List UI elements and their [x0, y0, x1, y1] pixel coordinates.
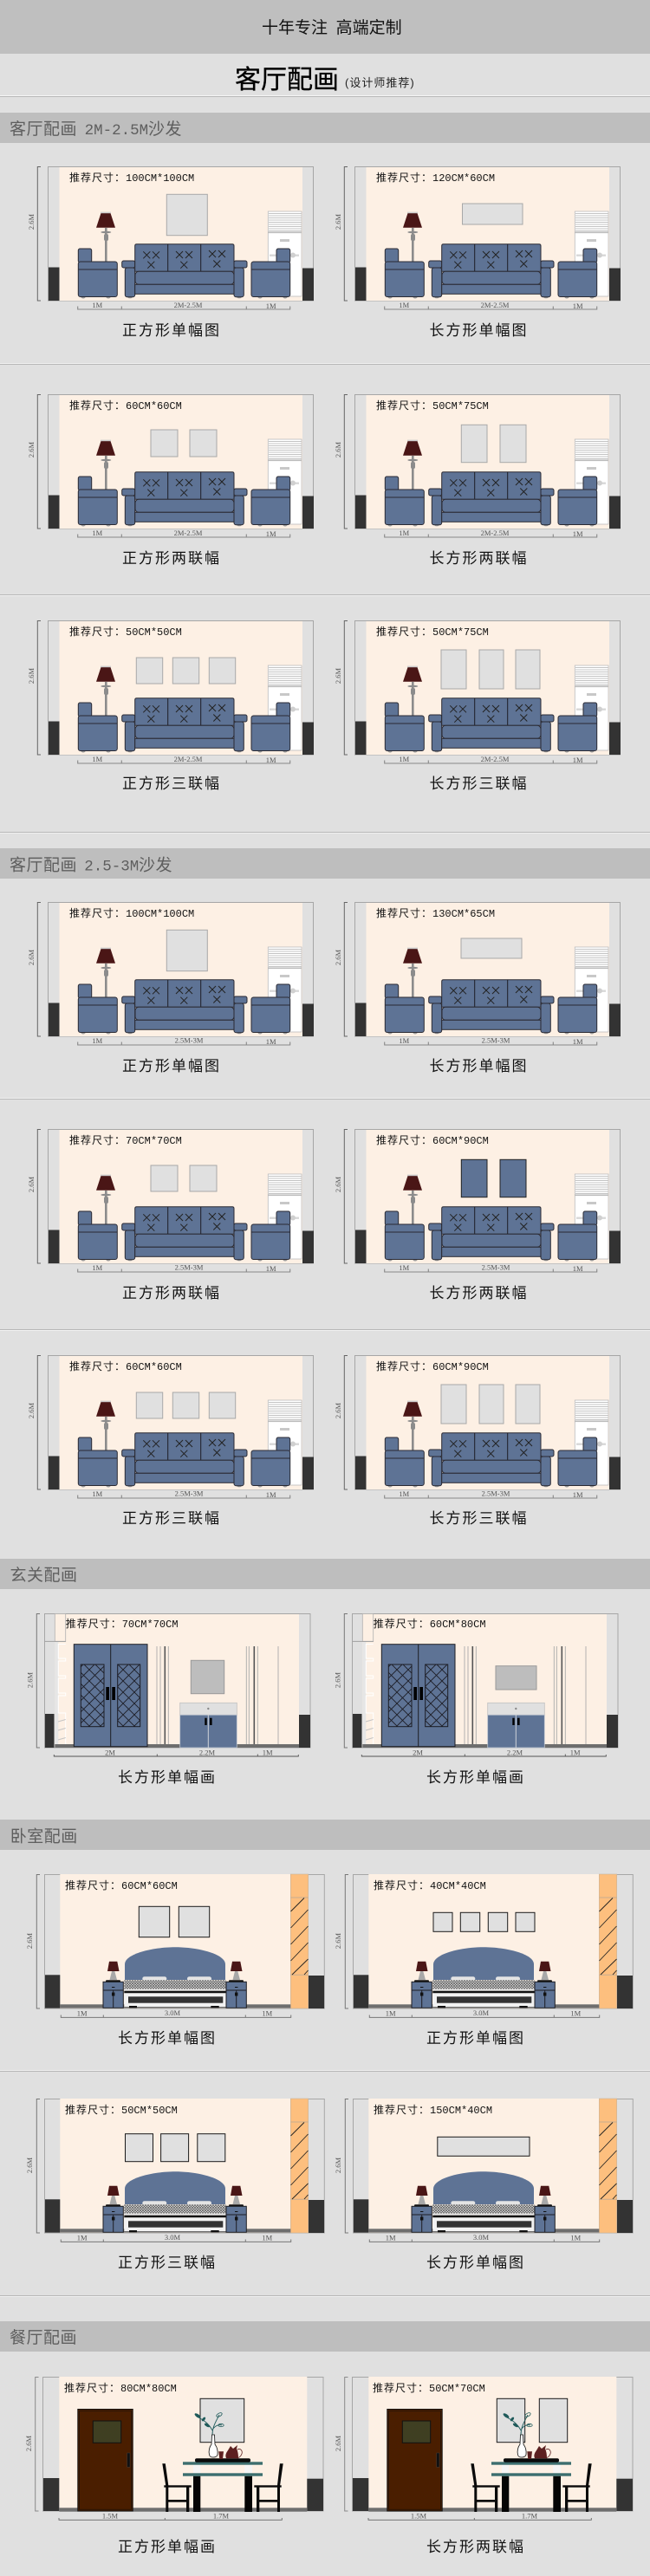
dimensions: 1M — [266, 1037, 276, 1046]
dimensions — [27, 949, 276, 1046]
dimensions: 1M — [570, 2009, 582, 2018]
size label: 推荐尺寸：120CM*60CM — [376, 170, 495, 185]
artwork — [139, 1906, 210, 1937]
dimensions: 2.6M — [26, 1671, 35, 1688]
section heading: living room 2M-2.5M: 沙发 — [148, 120, 182, 139]
size label: 推荐尺寸：50CM*75CM — [376, 624, 489, 639]
panel: living 2 rectangle single — [334, 903, 621, 1074]
dimensions: 1M — [266, 302, 276, 310]
size label: 推荐尺寸：50CM*50CM — [65, 2102, 178, 2117]
dimensions: 1M — [92, 1263, 103, 1272]
dimensions: 2.6M — [27, 213, 36, 230]
dimensions — [25, 2157, 273, 2242]
panel: living 1 rectangle single — [334, 166, 621, 339]
dimensions: 1M — [266, 1490, 276, 1499]
artwork — [463, 204, 523, 224]
caption: 长方形单幅图 — [430, 322, 529, 339]
caption: 正方形两联幅 — [122, 1285, 221, 1301]
caption: 长方形三联幅 — [430, 1510, 529, 1527]
panel: dining right — [334, 2377, 633, 2555]
caption: 正方形两联幅 — [122, 550, 221, 567]
section heading: living room 2M-2.5M — [0, 113, 650, 143]
panel: living 1 square triptych — [27, 620, 314, 792]
dimensions: 1M — [399, 529, 410, 537]
dimensions: 1M — [266, 529, 276, 538]
dimensions: 2M-2.5M — [174, 529, 203, 537]
size label: 推荐尺寸：70CM*70CM — [69, 1132, 182, 1147]
dimensions: 1M — [399, 1489, 410, 1498]
panel: living 1 square single — [27, 166, 314, 339]
dimensions: 2.6M — [334, 667, 342, 684]
dimensions: 2.6M — [27, 1176, 36, 1192]
dimensions: 2.6M — [334, 949, 342, 965]
dimensions: 2.6M — [334, 1176, 342, 1192]
dimensions — [334, 949, 583, 1046]
panel: living 2 rectangle triptych — [334, 1355, 621, 1527]
section heading: living room 2.5-3M — [0, 848, 650, 879]
dimensions — [27, 1176, 276, 1273]
dimensions — [27, 667, 276, 764]
artwork — [136, 658, 236, 684]
dimensions: 1M — [92, 1489, 103, 1498]
dimensions: 1M — [92, 1036, 103, 1045]
dimensions: 2.5M-3M — [482, 1263, 510, 1272]
dimensions: 2M-2.5M — [174, 301, 203, 309]
size label: 推荐尺寸：100CM*100CM — [69, 170, 194, 185]
dimensions: 1M — [573, 756, 583, 764]
section heading: living room 2.5-3M: 2.5-3M — [84, 858, 139, 875]
dimensions: 3.0M — [165, 2233, 181, 2242]
panel: living 1 square diptych — [27, 395, 314, 567]
dimensions: 2.6M — [334, 441, 342, 457]
dimensions — [27, 1402, 276, 1499]
size label: 推荐尺寸：150CM*40CM — [374, 2102, 492, 2117]
panel: bedroom 2 left — [25, 2099, 324, 2271]
dimensions: 1M — [573, 302, 583, 310]
dimensions: 2.6M — [27, 667, 36, 684]
dimensions — [334, 2157, 582, 2242]
dimensions: 1M — [263, 1749, 273, 1757]
dimensions: 1M — [92, 301, 103, 309]
caption: 正方形单幅图 — [426, 2030, 525, 2047]
section heading: living room 2.5-3M: 客厅配画 — [10, 856, 77, 875]
section heading: dining room — [0, 2321, 650, 2352]
artwork — [496, 1666, 536, 1690]
dimensions: 2.5M-3M — [175, 1263, 204, 1272]
section heading: entryway: 玄关配画 — [10, 1566, 78, 1585]
size label: 推荐尺寸：100CM*100CM — [69, 905, 194, 920]
size label: 推荐尺寸：80CM*80CM — [64, 2380, 177, 2395]
dimensions: 2M-2.5M — [481, 755, 510, 763]
dimensions — [334, 1932, 582, 2018]
caption: 正方形单幅图 — [122, 1058, 221, 1074]
top banner: 十年专注 — [262, 19, 328, 37]
main title: 客厅配画 — [235, 66, 339, 94]
dimensions: 1M — [262, 2009, 273, 2018]
size label: 推荐尺寸：60CM*90CM — [376, 1359, 489, 1373]
section heading: dining room: 餐厅配画 — [10, 2328, 77, 2347]
dimensions — [26, 1671, 273, 1757]
artwork — [151, 430, 217, 457]
panel: living 2 square single — [27, 903, 314, 1074]
main title — [0, 66, 650, 97]
panel: living 1 rectangle diptych — [334, 395, 621, 567]
artwork — [166, 930, 207, 971]
caption: 长方形单幅图 — [118, 2030, 217, 2047]
dimensions: 1M — [573, 1490, 583, 1499]
dimensions — [334, 2435, 538, 2521]
panel: bedroom 1 right — [334, 1874, 633, 2047]
size label: 推荐尺寸：60CM*60CM — [69, 1359, 182, 1373]
dimensions: 1M — [77, 2009, 88, 2018]
dimensions — [334, 441, 583, 538]
dining table set — [471, 2412, 592, 2512]
dimensions: 2.6M — [334, 213, 342, 230]
dimensions: 1M — [262, 2234, 273, 2242]
dimensions: 1.7M — [522, 2512, 538, 2521]
dimensions: 2.5M-3M — [175, 1036, 204, 1045]
dimensions: 1.5M — [411, 2512, 427, 2521]
artwork — [497, 2398, 568, 2443]
dimensions: 1M — [399, 1263, 410, 1272]
dimensions: 3.0M — [165, 2008, 181, 2017]
size label: 推荐尺寸：50CM*50CM — [69, 624, 182, 639]
dimensions: 2.6M — [334, 2435, 342, 2451]
size label: 推荐尺寸：130CM*65CM — [376, 905, 495, 920]
panel: entry left — [26, 1613, 310, 1786]
artwork — [125, 2134, 225, 2162]
artwork — [433, 1912, 535, 1931]
section heading: bedroom: 卧室配画 — [10, 1827, 78, 1846]
dimensions: 2.6M — [334, 1932, 342, 1949]
dimensions: 1M — [570, 2234, 582, 2242]
dining table set — [162, 2412, 283, 2512]
section heading: living room 2M-2.5M: 2M-2.5M — [85, 122, 148, 140]
panel: dining left — [24, 2377, 323, 2555]
artwork — [438, 2137, 530, 2156]
artwork — [191, 1660, 224, 1694]
dimensions: 2M-2.5M — [481, 529, 510, 537]
dimensions: 2M — [413, 1749, 423, 1757]
size label: 推荐尺寸：40CM*40CM — [374, 1878, 486, 1892]
dimensions: 2.2M — [507, 1749, 523, 1757]
dimensions: 3.0M — [473, 2008, 490, 2017]
dimensions: 2.6M — [25, 2157, 34, 2173]
size label: 推荐尺寸：50CM*70CM — [373, 2380, 485, 2395]
caption: 长方形单幅画 — [426, 1769, 525, 1786]
dimensions — [24, 2435, 230, 2521]
dimensions: 1M — [573, 529, 583, 538]
dimensions — [27, 441, 276, 538]
top banner — [0, 0, 650, 54]
dimensions — [25, 1932, 273, 2018]
dimensions — [334, 213, 583, 310]
section heading: entryway — [0, 1559, 650, 1589]
dimensions: 1M — [386, 2234, 396, 2242]
dimensions: 2M-2.5M — [174, 755, 203, 763]
caption: 正方形单幅图 — [122, 322, 221, 339]
artwork — [441, 1385, 540, 1424]
dimensions: 1M — [570, 1749, 581, 1757]
caption: 长方形单幅图 — [426, 2255, 525, 2271]
caption: 正方形三联幅 — [118, 2255, 217, 2271]
dimensions: 1.7M — [213, 2512, 230, 2521]
artwork — [151, 1165, 217, 1191]
top banner: 高端定制 — [336, 18, 402, 37]
caption: 长方形两联幅 — [430, 1285, 529, 1301]
dimensions: 2.6M — [334, 1402, 342, 1418]
dimensions: 1M — [399, 301, 410, 309]
caption: 长方形三联幅 — [430, 775, 529, 792]
dimensions: 2.6M — [27, 1402, 36, 1418]
caption: 正方形三联幅 — [122, 775, 221, 792]
dimensions: 1.5M — [102, 2512, 119, 2521]
artwork — [461, 1159, 526, 1197]
dimensions — [334, 1176, 583, 1273]
section heading: bedroom — [0, 1820, 650, 1850]
dimensions: 1M — [386, 2009, 396, 2018]
panel: living 2 rectangle diptych — [334, 1130, 621, 1301]
dimensions: 1M — [399, 755, 410, 763]
artwork — [441, 650, 540, 689]
artwork — [461, 938, 522, 958]
panel: living 1 rectangle triptych — [334, 620, 621, 792]
dimensions — [334, 1402, 583, 1499]
dimensions: 1M — [266, 756, 276, 764]
dimensions: 3.0M — [473, 2233, 490, 2242]
size label: 推荐尺寸：60CM*60CM — [69, 398, 182, 412]
panel: entry right — [333, 1613, 618, 1786]
caption: 长方形两联幅 — [426, 2539, 525, 2555]
dimensions: 2M — [105, 1749, 115, 1757]
dimensions — [334, 667, 583, 764]
artwork — [200, 2398, 244, 2443]
size label: 推荐尺寸：60CM*60CM — [65, 1878, 178, 1892]
panel: bedroom 2 right — [334, 2099, 633, 2271]
dimensions: 2M-2.5M — [481, 301, 510, 309]
caption: 正方形三联幅 — [122, 1510, 221, 1527]
dimensions: 2.6M — [333, 1671, 341, 1688]
dimensions: 2.5M-3M — [482, 1489, 510, 1498]
size label: 推荐尺寸：60CM*80CM — [374, 1616, 486, 1631]
dimensions: 2.2M — [199, 1749, 216, 1757]
dimensions: 2.6M — [25, 1932, 34, 1949]
panel: bedroom 1 left — [25, 1874, 324, 2047]
panel: living 2 square triptych — [27, 1355, 314, 1527]
dimensions: 2.6M — [334, 2157, 342, 2173]
dimensions: 1M — [77, 2234, 88, 2242]
dimensions: 1M — [573, 1037, 583, 1046]
artwork — [166, 194, 207, 236]
artwork — [136, 1392, 236, 1418]
size label: 推荐尺寸：50CM*75CM — [376, 398, 489, 412]
dimensions: 1M — [399, 1036, 410, 1045]
dimensions: 1M — [92, 529, 103, 537]
caption: 长方形单幅图 — [430, 1058, 529, 1074]
dimensions: 2.6M — [27, 441, 36, 457]
dimensions — [333, 1671, 581, 1757]
dimensions — [27, 213, 276, 310]
dimensions: 2.6M — [27, 949, 36, 965]
size label: 推荐尺寸：70CM*70CM — [66, 1616, 179, 1631]
artwork — [461, 425, 526, 463]
caption: 长方形两联幅 — [430, 550, 529, 567]
panel: living 2 square diptych — [27, 1130, 314, 1301]
caption: 长方形单幅画 — [118, 1769, 217, 1786]
dimensions: 1M — [266, 1264, 276, 1273]
size label: 推荐尺寸：60CM*90CM — [376, 1132, 489, 1147]
section heading: living room 2M-2.5M: 客厅配画 — [10, 120, 77, 139]
caption: 正方形单幅画 — [118, 2539, 217, 2555]
main title: (设计师推荐) — [345, 76, 415, 89]
dimensions: 2.6M — [24, 2435, 33, 2451]
dimensions: 2.5M-3M — [175, 1489, 204, 1498]
dimensions: 1M — [573, 1264, 583, 1273]
dimensions: 2.5M-3M — [482, 1036, 510, 1045]
section heading: living room 2.5-3M: 沙发 — [139, 856, 172, 875]
dimensions: 1M — [92, 755, 103, 763]
